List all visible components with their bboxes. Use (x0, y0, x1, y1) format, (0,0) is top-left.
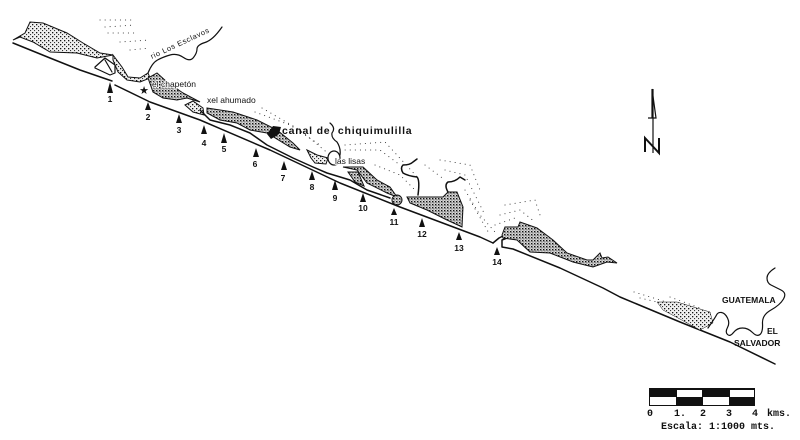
black marker: canal (267, 126, 281, 139)
marker 12 (417, 218, 427, 239)
marker 1 (107, 82, 113, 104)
marker 2 (145, 102, 151, 122)
label: rio Los Esclavos: rio Los Esclavos (149, 26, 211, 61)
station markers 1 to 14 (107, 82, 502, 267)
scale labels: kms. (767, 408, 791, 420)
marker 10 (358, 193, 368, 213)
lagoon: las lisas blob (328, 151, 340, 165)
lagoon: loop near 1 (95, 58, 115, 75)
lagoon: small near 8 (307, 150, 328, 164)
marker 6: 6 (253, 159, 258, 169)
river: near 13 (446, 177, 465, 192)
scale bar (649, 388, 755, 406)
marker 14 (492, 247, 502, 267)
marker 1: 1 (108, 94, 113, 104)
stippled dunes (100, 20, 705, 320)
blob: near 11 (392, 195, 402, 205)
marker 7 (281, 161, 287, 183)
marker 7: 7 (281, 173, 286, 183)
lagoon: border area (657, 302, 713, 330)
lagoon: west (13, 22, 113, 58)
channel to Rio Los Esclavos (113, 55, 150, 82)
label: las lisas: las lisas (335, 156, 365, 166)
marker 14: 14 (492, 257, 502, 267)
marker 3 (176, 114, 182, 135)
marker 9 (332, 180, 338, 203)
scale labels: 2 (700, 409, 706, 420)
marker 13 (454, 232, 464, 253)
marker 12: 12 (417, 229, 427, 239)
marker 13: 13 (454, 243, 464, 253)
marker 2: 2 (146, 112, 151, 122)
scale labels: 0 (647, 409, 653, 420)
marker 4: 4 (202, 138, 207, 148)
marker 4 (201, 125, 207, 148)
marker 11 (390, 208, 399, 227)
marker 11: 11 (390, 217, 399, 227)
lagoon: near 10 (343, 167, 397, 197)
label: el chapeton: el chapetón (152, 79, 196, 89)
lagoon: near 9 (348, 172, 364, 186)
river: Rio Los Esclavos (148, 27, 222, 73)
marker 3: 3 (177, 125, 182, 135)
scale labels: 1. (674, 409, 686, 420)
coastline (13, 43, 775, 364)
marker 9: 9 (333, 193, 338, 203)
river: Guatemala El Salvador border (708, 268, 785, 335)
scale labels: 4 (752, 409, 758, 420)
marker 5 (221, 133, 227, 154)
marker 8 (309, 171, 315, 192)
lagoon: 12 to 13 (407, 192, 463, 227)
icon: north arrow (645, 89, 659, 153)
marker 10: 10 (358, 203, 368, 213)
marker 5: 5 (222, 144, 227, 154)
scale caption: Escala: 1:1000 mts. (661, 421, 775, 433)
label: Guatemala: GUATEMALA (722, 295, 776, 305)
river: las lisas (330, 123, 340, 155)
marker 6 (253, 148, 259, 169)
lagoon: 14 eastern (502, 222, 617, 267)
scale labels: 3 (726, 409, 732, 420)
label: El: EL (767, 326, 778, 336)
canal de chiquimulilla channel (200, 110, 390, 198)
label: xel ahumado: xel ahumado (207, 95, 256, 105)
icon: star el chapeton: ★ (139, 85, 149, 97)
lagoon: oval near ahumado (185, 101, 204, 115)
lagoon: ahumado to canal (207, 108, 300, 150)
label: canal de chiquimulilla: canal de chiquimulilla (282, 125, 412, 137)
river: near 11 (402, 159, 419, 195)
lagoon: el chapeton (148, 73, 200, 102)
marker 8: 8 (310, 182, 315, 192)
label: Salvador: SALVADOR (734, 338, 780, 348)
